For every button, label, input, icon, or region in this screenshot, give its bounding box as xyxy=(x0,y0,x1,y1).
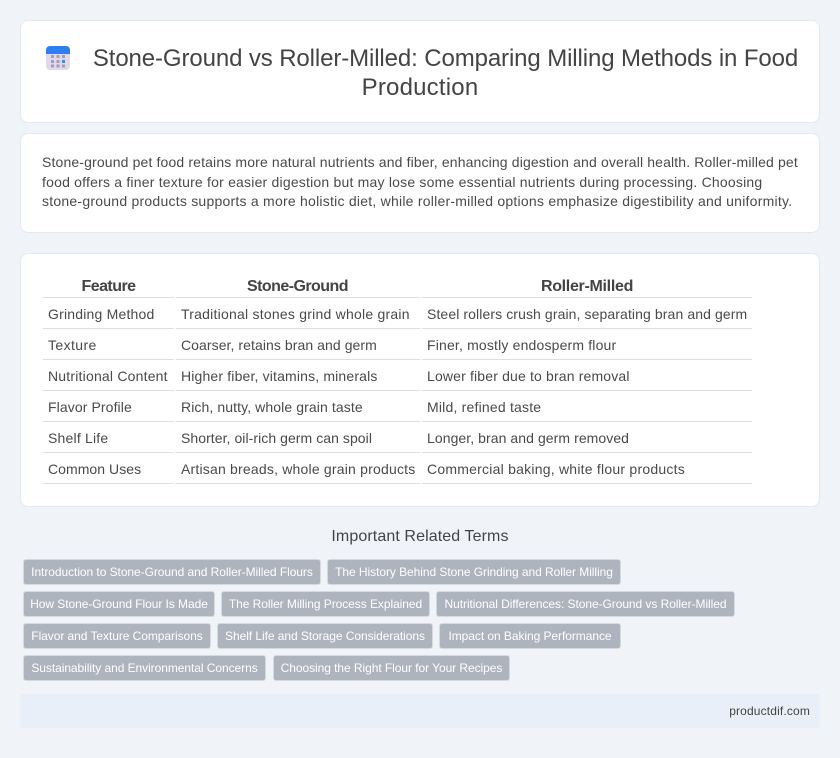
row: common uses: Common Uses xyxy=(48,461,141,477)
related terms chips: Nutritional Differences: Stone-Ground vs Roller-Milled xyxy=(444,597,726,611)
related terms chips: The Roller Milling Process Explained xyxy=(229,597,422,611)
table header: Feature xyxy=(82,278,135,295)
row: grinding method: Grinding Method xyxy=(48,306,155,322)
related terms heading: Important Related Terms xyxy=(331,528,509,545)
row: shelf life: Shorter, oil-rich germ can spoil xyxy=(181,430,372,446)
intro text xyxy=(42,154,798,209)
row: nutritional content xyxy=(48,368,630,384)
row: flavor profile: Rich, nutty, whole grain taste xyxy=(181,399,363,415)
footer source: productdif.com xyxy=(729,704,810,718)
footer bar xyxy=(20,694,820,728)
related terms chips: Shelf Life and Storage Considerations xyxy=(225,629,425,643)
table header xyxy=(82,278,633,295)
row: grinding method: Traditional stones grind whole grain xyxy=(181,306,410,322)
related terms chips: Flavor and Texture Comparisons xyxy=(31,629,203,643)
related terms chips: Introduction to Stone-Ground and Roller-Milled Flours xyxy=(31,565,313,579)
related terms chips: Impact on Baking Performance xyxy=(448,629,612,643)
related terms chips: Choosing the Right Flour for Your Recipes xyxy=(281,661,502,675)
row: common uses: Commercial baking, white flour products xyxy=(427,461,685,477)
row: nutritional content: Lower fiber due to bran removal xyxy=(427,368,630,384)
row: common uses: Artisan breads, whole grain products xyxy=(181,461,415,477)
header panel xyxy=(20,20,820,123)
related terms chips: How Stone-Ground Flour Is Made xyxy=(30,597,208,611)
row: grinding method: Steel rollers crush grain, separating bran and germ xyxy=(427,306,747,322)
table header: Roller-Milled xyxy=(541,278,633,295)
row: texture xyxy=(48,337,616,353)
row: flavor profile: Flavor Profile xyxy=(48,399,132,415)
row: flavor profile: Mild, refined taste xyxy=(427,399,541,415)
row: nutritional content: Nutritional Content xyxy=(48,368,168,384)
row: texture: Texture xyxy=(48,337,97,353)
intro text: food offers a finer texture for easier digestion but may lose some essential nutrients during processing. Choosing xyxy=(42,174,762,190)
row: nutritional content: Higher fiber, vitamins, minerals xyxy=(181,368,378,384)
icon: calendar xyxy=(46,46,70,70)
related terms chips: The History Behind Stone Grinding and Roller Milling xyxy=(335,565,613,579)
row: common uses xyxy=(48,461,685,477)
row: grinding method xyxy=(48,306,747,322)
row: flavor profile xyxy=(48,399,541,415)
title: Stone-Ground vs Roller-Milled: Comparing Milling Methods in Food xyxy=(93,45,798,72)
row: texture: Coarser, retains bran and germ xyxy=(181,337,377,353)
table header: Stone-Ground xyxy=(247,278,348,295)
related terms chips: Sustainability and Environmental Concerns xyxy=(31,661,258,675)
row: shelf life: Longer, bran and germ removed xyxy=(427,430,629,446)
intro text: stone-ground products supports a more holistic diet, while roller-milled options emphasize digestibility and uniformity. xyxy=(42,193,792,209)
panel: comparison table xyxy=(20,253,820,507)
row: shelf life: Shelf Life xyxy=(48,430,108,446)
row: texture: Finer, mostly endosperm flour xyxy=(427,337,616,353)
intro text: Stone-ground pet food retains more natural nutrients and fiber, enhancing digestion and overall health. Roller-milled pet xyxy=(42,154,798,170)
related terms chips xyxy=(23,559,735,681)
panel: intro xyxy=(20,133,820,233)
title second line: Production xyxy=(362,74,478,101)
row: shelf life xyxy=(48,430,629,446)
